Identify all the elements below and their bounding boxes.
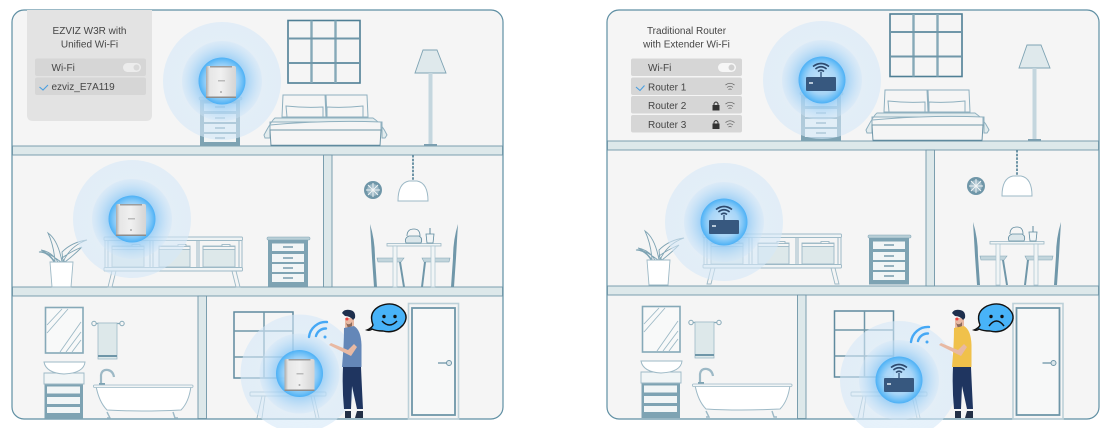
icon: EZVIZ W3R bedroom <box>206 66 236 98</box>
row: Wi-Fi toggle: Wi-Fi <box>52 63 75 74</box>
person with blue shirt <box>329 310 363 418</box>
sideboard <box>703 234 842 284</box>
Wi-Fi menu: EZVIZ <box>27 10 152 121</box>
signal rings: living room <box>665 163 783 281</box>
sideboard <box>104 237 242 287</box>
menu subtitle: with Extender Wi-Fi <box>642 40 730 50</box>
speech bubble: happy <box>367 304 406 332</box>
row: Router 3: Router 3 <box>648 120 687 131</box>
row: Wi-Fi toggle: Wi-Fi <box>648 63 671 74</box>
Wi-Fi menu: traditional router <box>631 26 742 132</box>
menu subtitle: Unified Wi-Fi <box>61 40 118 50</box>
dresser: living room <box>267 237 310 286</box>
floor lamp <box>1019 45 1050 141</box>
door <box>1013 304 1063 419</box>
signal rings: lower room <box>240 314 358 428</box>
bed <box>264 95 387 146</box>
wall: middle floor <box>324 155 332 287</box>
panel: EZVIZ W3R unified Wi-Fi house <box>12 10 503 428</box>
wall clock <box>364 181 382 199</box>
bed <box>866 90 989 141</box>
dining set <box>370 224 458 287</box>
speech bubble: sad <box>974 304 1013 332</box>
mirror <box>642 306 680 352</box>
row: Router 2: Router 2 <box>648 101 687 112</box>
signal rings: bedroom <box>163 22 281 140</box>
window: lower room <box>834 311 894 377</box>
towel rail <box>689 320 721 358</box>
dining set <box>973 222 1061 285</box>
window: lower room <box>234 312 293 378</box>
bathtub <box>94 370 193 418</box>
signal rings: bedroom <box>763 21 881 139</box>
plant <box>39 233 87 287</box>
dresser: living room <box>868 235 911 284</box>
icon: EZVIZ W3R living room <box>116 204 146 236</box>
icon: router lower room <box>884 364 914 392</box>
floor lamp <box>415 50 446 146</box>
icon: phone Wi-Fi signal <box>309 322 327 338</box>
bench <box>250 392 326 418</box>
towel rail <box>92 321 124 359</box>
bench <box>851 392 927 418</box>
panel: traditional router with extender house <box>607 10 1099 428</box>
row: selected network: ezviz_E7A119 <box>52 82 115 93</box>
window: bedroom <box>890 14 962 76</box>
floor slab: upper <box>12 146 502 155</box>
vanity <box>44 362 85 419</box>
person with yellow shirt <box>939 310 973 418</box>
window: bedroom <box>288 20 360 83</box>
mirror <box>46 308 83 353</box>
signal rings: lower room <box>840 321 958 428</box>
wall clock <box>967 177 985 195</box>
door <box>408 304 458 419</box>
dresser: bedroom <box>199 97 242 146</box>
floor slab: lower <box>608 286 1098 295</box>
icon: router living room <box>709 206 739 234</box>
row: Router 1: Router 1 <box>648 82 687 94</box>
icon: EZVIZ W3R lower room <box>284 359 314 391</box>
bathtub <box>692 369 792 417</box>
plant <box>636 231 684 285</box>
icon: phone Wi-Fi signal <box>911 327 929 344</box>
vanity <box>641 361 682 418</box>
menu title: Traditional Router <box>647 26 727 37</box>
dresser: bedroom <box>800 92 843 142</box>
pendant lamp <box>398 155 428 201</box>
wall: bottom floor <box>198 296 206 418</box>
wall: middle floor <box>926 150 934 286</box>
icon: router bedroom <box>806 64 836 91</box>
pendant lamp <box>1002 150 1032 196</box>
floor slab: lower <box>12 287 502 296</box>
wall: bottom floor <box>798 295 806 418</box>
signal rings: living room <box>73 160 191 278</box>
floor slab: upper <box>608 141 1098 150</box>
menu title: EZVIZ W3R with <box>53 26 126 37</box>
